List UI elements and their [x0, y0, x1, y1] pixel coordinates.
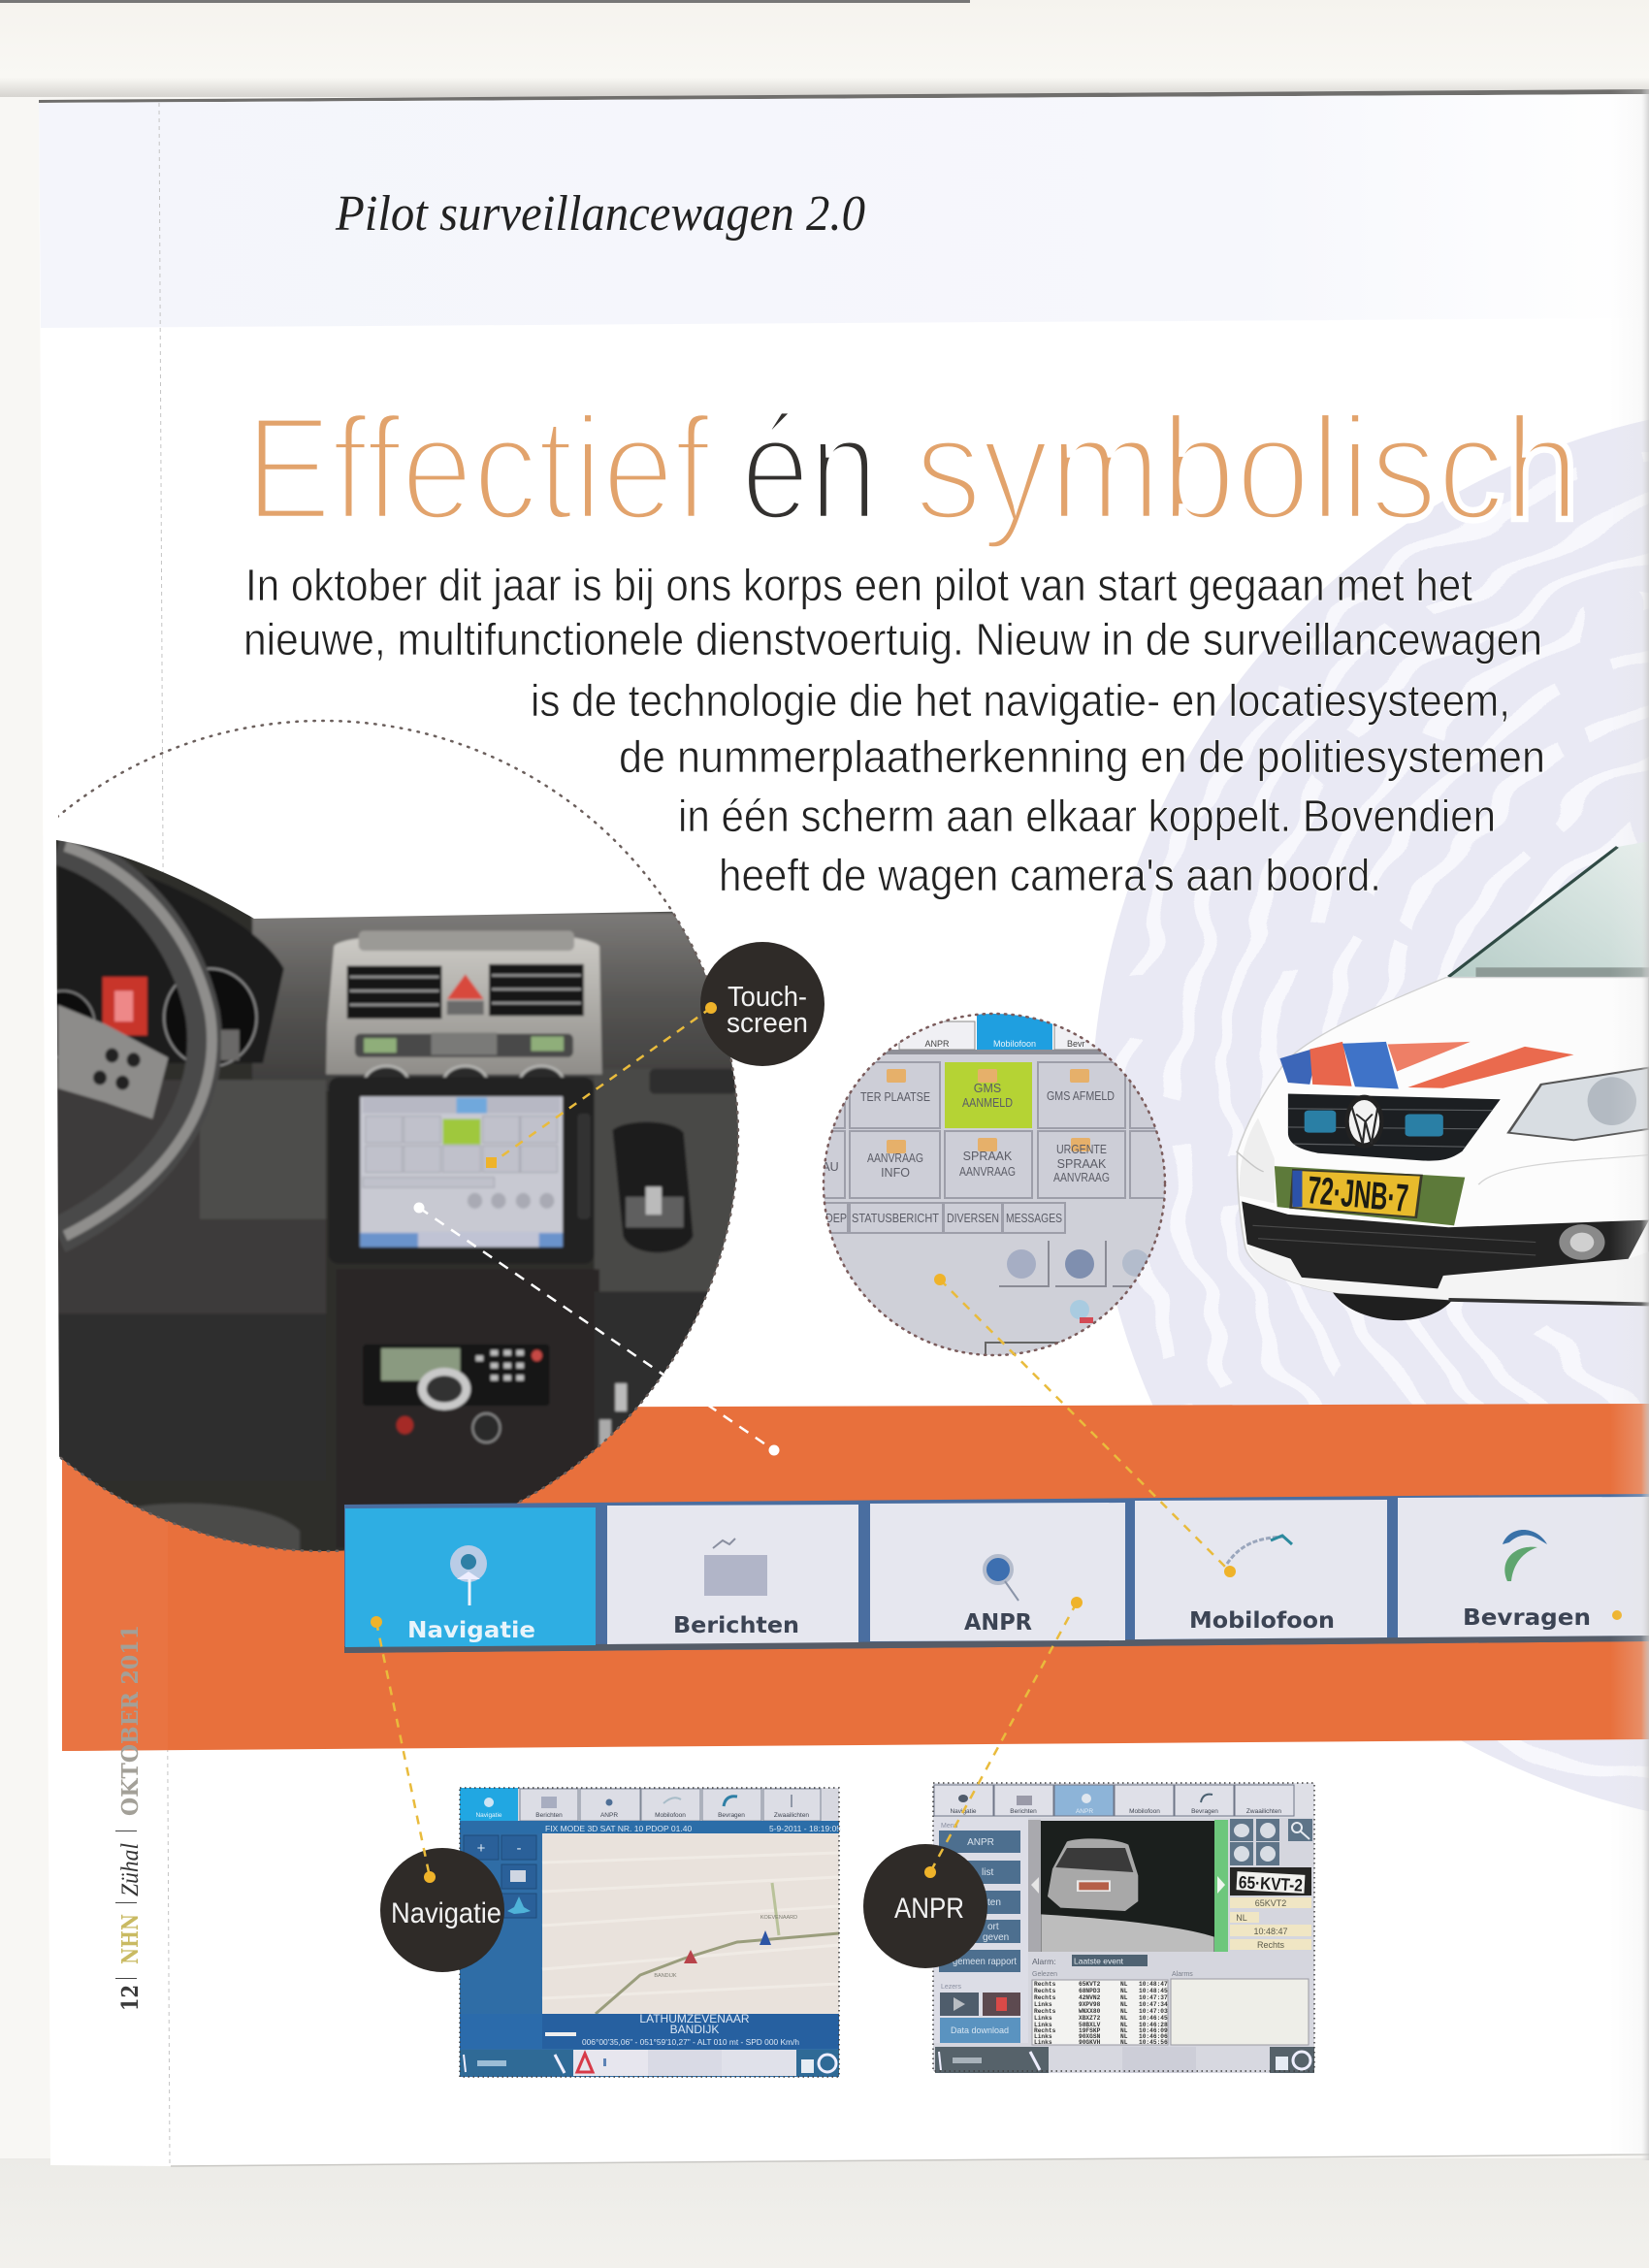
navigation screenshot: 5-9-2011 - 18:19:05	[769, 1824, 841, 1833]
ANPR screenshot: 9XPV98	[1079, 2001, 1101, 2008]
touchscreen detail circle: ANPR	[924, 1039, 950, 1049]
navigation screenshot: Navigatie	[475, 1812, 502, 1819]
ANPR screenshot: 42NVN2	[1079, 1994, 1101, 2001]
dotted photo circle outline	[0, 721, 738, 1551]
ANPR screenshot: Zwaailichten	[1246, 1808, 1281, 1815]
ANPR screenshot: 90XGSN	[1079, 2033, 1101, 2040]
ANPR screenshot: Links	[1034, 2022, 1052, 2028]
ANPR screenshot: Rechts	[1034, 1981, 1056, 1988]
ANPR screenshot: 68NPD3	[1079, 1988, 1101, 1994]
spine folio	[115, 1625, 144, 2011]
navigation screenshot: LATHUMZEVENAAR	[639, 2012, 750, 2025]
ANPR screenshot: ANPR	[967, 1837, 994, 1848]
callout: ANPR: ANPR	[894, 1893, 964, 1925]
navigation screenshot: Zwaailichten	[774, 1812, 809, 1819]
ANPR screenshot: Links	[1034, 2039, 1052, 2046]
ANPR screenshot: NL	[1120, 2033, 1128, 2040]
ANPR screenshot: 10:47:34	[1139, 2001, 1168, 2008]
tab: Berichten: Berichten	[673, 1613, 799, 1638]
navigation screenshot	[460, 1788, 841, 2077]
ANPR screenshot: Alarm:	[1032, 1957, 1056, 1966]
ANPR screenshot: 10:46:45	[1139, 2015, 1168, 2022]
touchscreen detail circle: URGENTE	[1056, 1143, 1107, 1156]
ANPR screenshot: 90GKVH	[1079, 2039, 1101, 2046]
touchscreen detail circle: GMS AFMELD	[1047, 1089, 1115, 1103]
ANPR screenshot: Laatste event	[1074, 1956, 1124, 1965]
ANPR screenshot: 10:48:45	[1139, 1988, 1168, 1994]
tab: Bevragen: Bevragen	[1463, 1605, 1591, 1631]
police car	[1237, 841, 1649, 1320]
tab: Bevragen	[1398, 1497, 1649, 1637]
navigation screenshot: +	[477, 1840, 486, 1857]
callout: Touchscreen: screen	[727, 1008, 808, 1039]
ANPR screenshot: NL	[1236, 1913, 1247, 1923]
right page edge shading	[1610, 89, 1649, 2160]
heading: Effectief	[245, 386, 711, 551]
ANPR screenshot: NL	[1120, 1988, 1128, 1994]
tab: ANPR: ANPR	[964, 1610, 1032, 1636]
touchscreen detail circle: DEP	[825, 1212, 847, 1225]
spine folio: NHN	[117, 1914, 144, 1964]
spine folio: Zühal	[117, 1843, 144, 1896]
heading	[245, 386, 1579, 551]
navigation screenshot: BANDIJK	[654, 1973, 677, 1979]
orange band	[62, 1404, 1649, 1751]
navigation screenshot: KOEVENAARD	[760, 1915, 797, 1921]
ANPR screenshot: Rechts	[1034, 1988, 1056, 1994]
navigation screenshot: 006°00'35,06" - 051°59'10,27" - ALT 010 mt - SPD 000 Km/h	[582, 2038, 799, 2047]
navigation screenshot: -	[516, 1840, 522, 1857]
navigation screenshot: Bevragen	[718, 1812, 745, 1819]
ANPR screenshot: NL	[1120, 1994, 1128, 2001]
page dashed margin line	[159, 103, 170, 2165]
licence plate text: 72·JNB·7	[1306, 1169, 1410, 1220]
ANPR screenshot: 10:47:03	[1139, 2008, 1168, 2015]
ANPR screenshot: 10:46:28	[1139, 2022, 1168, 2028]
ANPR screenshot: Alarms	[1172, 1971, 1193, 1978]
tab: Mobilofoon	[1135, 1500, 1387, 1639]
tab: Navigatie: Navigatie	[407, 1618, 535, 1643]
ANPR screenshot: WNXX80	[1079, 2008, 1101, 2015]
fingerprint background	[1067, 388, 1649, 1843]
ANPR screenshot: ort	[987, 1922, 999, 1932]
dashboard photo	[56, 840, 738, 1551]
ANPR screenshot: Links	[1034, 2033, 1052, 2040]
ANPR screenshot: Berichten	[1010, 1808, 1037, 1815]
ANPR screenshot: Rechts	[1034, 2027, 1056, 2034]
ANPR screenshot: 65KVT2	[1079, 1981, 1101, 1988]
top lavender band	[39, 94, 1649, 328]
tab: ANPR	[870, 1503, 1125, 1641]
touchscreen detail circle: AANMELD	[962, 1096, 1013, 1110]
touchscreen detail circle: INFO	[881, 1166, 910, 1180]
tab: Navigatie	[345, 1507, 596, 1647]
ANPR screenshot: Gelezen	[1032, 1971, 1057, 1978]
section title: Pilot surveillancewagen 2.0	[335, 186, 865, 242]
ANPR screenshot: Bevragen	[1191, 1808, 1218, 1815]
touchscreen detail circle: GMS	[974, 1082, 1001, 1095]
intro text: is de technologie die het navigatie- en locatiesysteem,	[531, 675, 1510, 726]
ANPR screenshot: Data download	[951, 2025, 1009, 2035]
yellow connector dots	[371, 1002, 1622, 1883]
ANPR screenshot: NL	[1120, 2022, 1128, 2028]
callout: Touchscreen	[700, 942, 824, 1066]
tab: Mobilofoon: Mobilofoon	[1189, 1608, 1335, 1634]
ANPR screenshot: NL	[1120, 2001, 1128, 2008]
ANPR screenshot: 10:46:09	[1139, 2027, 1168, 2034]
ANPR screenshot: Links	[1034, 2015, 1052, 2022]
ANPR screenshot: 65KVT2	[1255, 1898, 1286, 1908]
navigation screenshot: FIX MODE 3D SAT NR. 10 PDOP 01.40	[545, 1824, 692, 1833]
ANPR screenshot: ANPR	[1076, 1808, 1093, 1815]
ANPR screenshot: Lezers	[941, 1984, 962, 1991]
callout: ANPR	[863, 1844, 987, 1968]
ANPR screenshot: gemeen rapport	[953, 1957, 1017, 1967]
ANPR screenshot: 10:47:37	[1139, 1994, 1168, 2001]
ANPR screenshot: XBXZ72	[1079, 2015, 1101, 2022]
touchscreen detail circle: SPRAAK	[1057, 1157, 1107, 1171]
yellow dashed connectors	[376, 1008, 1230, 1877]
intro text: In oktober dit jaar is bij ons korps een pilot van start gegaan met het	[245, 560, 1472, 610]
touchscreen detail circle: Bevr	[1067, 1039, 1085, 1049]
intro text: heeft de wagen camera's aan boord.	[719, 850, 1381, 900]
spine folio: 12	[117, 1985, 144, 2011]
intro text: in één scherm aan elkaar koppelt. Bovendien	[678, 791, 1496, 841]
ANPR screenshot: list	[982, 1867, 993, 1878]
touchscreen detail circle: AU	[822, 1160, 839, 1174]
ANPR screenshot: Rechts	[1034, 1994, 1056, 2001]
navigation screenshot: Mobilofoon	[655, 1812, 686, 1819]
ANPR screenshot: 10:48:47	[1253, 1927, 1288, 1936]
touchscreen detail circle: TER PLAATSE	[860, 1090, 930, 1104]
intro text: nieuwe, multifunctionele dienstvoertuig. Nieuw in de surveillancewagen	[243, 614, 1542, 664]
ANPR screenshot: geven	[983, 1932, 1009, 1943]
ANPR screenshot: 19FSKP	[1079, 2027, 1101, 2034]
touchscreen detail circle	[805, 1009, 1179, 1358]
spine folio: OKTOBER 2011	[117, 1625, 144, 1816]
navigation screenshot: BANDIJK	[670, 2023, 719, 2036]
heading: én	[741, 386, 878, 551]
touchscreen detail circle: STATUSBERICHT	[852, 1212, 939, 1225]
ANPR screenshot: Rechts	[1034, 2008, 1056, 2015]
touchscreen detail circle: SPRAAK	[963, 1150, 1013, 1163]
intro text	[243, 560, 1545, 900]
ANPR screenshot: 10:46:06	[1139, 2033, 1168, 2040]
ANPR screenshot: NL	[1120, 2015, 1128, 2022]
menu bar	[344, 1494, 1649, 1653]
intro text: de nummerplaatherkenning en de politiesystemen	[619, 731, 1545, 782]
white dashed connector	[413, 1203, 780, 1455]
ANPR screenshot	[933, 1783, 1314, 2073]
ANPR screenshot: 10:48:47	[1139, 1981, 1168, 1988]
touchscreen detail circle: AANVRAAG	[867, 1151, 923, 1165]
ANPR screenshot: Links	[1034, 2001, 1052, 2008]
touchscreen detail circle: AANVRAAG	[1053, 1171, 1110, 1184]
ANPR screenshot: Rechts	[1257, 1940, 1285, 1950]
ANPR screenshot: 65·KVT-2	[1238, 1872, 1303, 1895]
touchscreen detail circle: DIVERSEN	[947, 1212, 999, 1225]
touchscreen detail circle: AANVRAAG	[959, 1165, 1016, 1179]
ANPR screenshot: Menu	[941, 1823, 958, 1830]
ANPR screenshot: Navigatie	[950, 1808, 977, 1815]
callout: Touchscreen: Touch-	[728, 982, 807, 1013]
tab: Berichten	[607, 1505, 858, 1644]
ANPR screenshot: NL	[1120, 1981, 1128, 1988]
ANPR screenshot: NL	[1120, 2027, 1128, 2034]
navigation screenshot: ANPR	[600, 1812, 618, 1819]
ANPR screenshot: NL	[1120, 2008, 1128, 2015]
ANPR screenshot: Mobilofoon	[1129, 1808, 1160, 1815]
ANPR screenshot: 10:45:56	[1139, 2039, 1168, 2046]
callout: Navigatie: Navigatie	[391, 1897, 501, 1929]
navigation screenshot: Berichten	[535, 1812, 563, 1819]
callout: Navigatie	[380, 1848, 504, 1972]
touchscreen detail circle: Mobilofoon	[993, 1039, 1036, 1049]
ANPR screenshot: NL	[1120, 2039, 1128, 2046]
ANPR screenshot: 58BXLV	[1079, 2022, 1101, 2028]
touchscreen detail circle: MESSAGES	[1006, 1212, 1062, 1225]
heading: symbolisch	[915, 386, 1579, 551]
ANPR screenshot: ten	[987, 1897, 1001, 1908]
